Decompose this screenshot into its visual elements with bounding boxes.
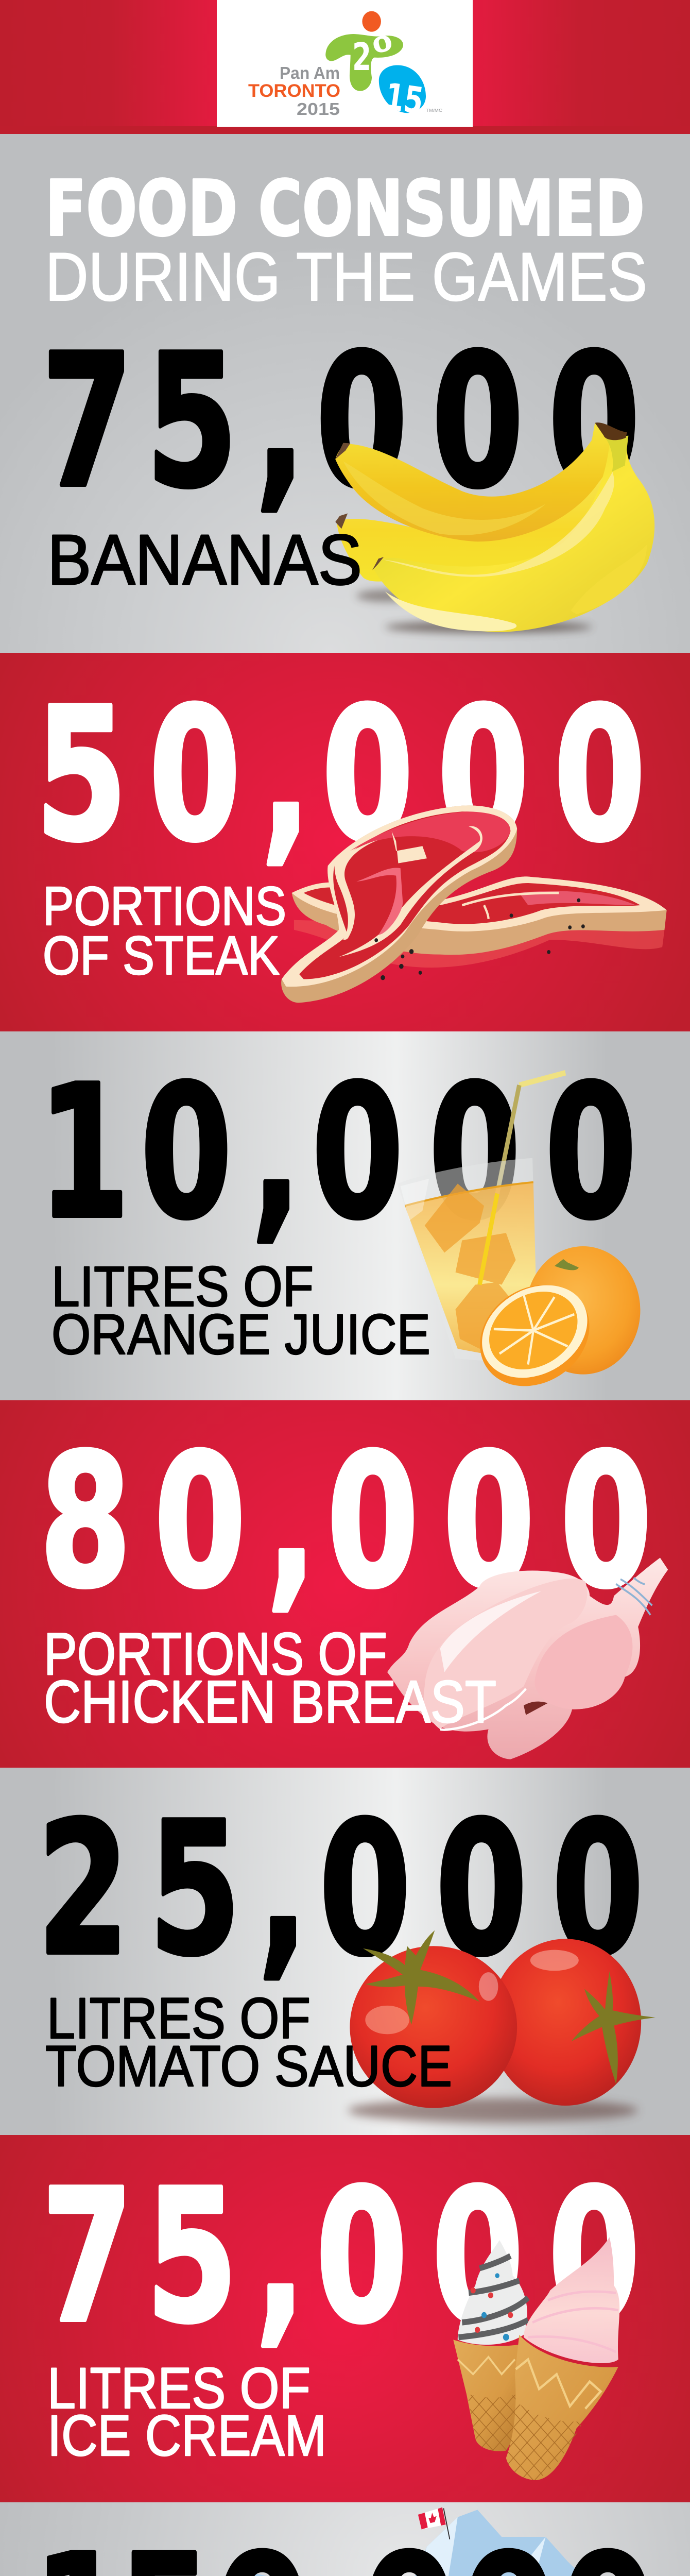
- label: litres of orange juice: LITRES OF: [51, 1255, 314, 1318]
- illustration: mountain with flag: [104, 2507, 647, 2576]
- number: 75,000: 75,000: [42, 315, 640, 528]
- label: litres of ice cream: ICE CREAM: [47, 2403, 326, 2468]
- title: [45, 164, 647, 315]
- label: litres of tomato sauce: TOMATO SAUCE: [45, 2034, 452, 2098]
- logo numerals: 0: [370, 30, 395, 59]
- logo: Pan Am Toronto 2015: [217, 0, 473, 127]
- logo figure body: [325, 34, 403, 91]
- panel: bananas: [0, 134, 690, 653]
- logo wordmark: 2015: [297, 99, 340, 118]
- number: 80,000: 80,000: [40, 1415, 652, 1628]
- header band: [0, 0, 690, 134]
- label: portions of chicken breast: PORTIONS OF: [44, 1620, 387, 1687]
- icon: chicken: [387, 1558, 668, 1759]
- label: litres of ice cream: LITRES OF: [47, 2356, 310, 2420]
- label: portions of steak: [43, 876, 286, 986]
- label: litres of tomato sauce: LITRES OF: [47, 1986, 310, 2050]
- logo wordmark: TM/MC: [426, 108, 442, 113]
- icon: juice glass and oranges: [398, 1073, 640, 1404]
- label: litres of ice cream: [47, 2356, 326, 2468]
- logo numerals: [352, 30, 426, 123]
- logo wordmark: TORONTO: [248, 81, 340, 101]
- label: litres of tomato sauce: [45, 1986, 452, 2098]
- number: 75,000: 75,000: [42, 2150, 640, 2363]
- icon: ice cream cones: [453, 2237, 619, 2480]
- panel: steak: [0, 653, 690, 1032]
- label: bananas: BANANAS: [47, 520, 362, 600]
- logo figure head: [362, 11, 381, 32]
- logo wordmark: Pan Am: [280, 63, 340, 82]
- logo numerals: 15: [383, 75, 426, 123]
- logo numerals: 2: [352, 35, 371, 79]
- number: 10,000: 10,000: [38, 1046, 636, 1259]
- panel: tomato sauce: [0, 1768, 690, 2136]
- label: portions of chicken breast: CHICKEN BREAST: [44, 1668, 496, 1735]
- panel: chicken: [0, 1400, 690, 1768]
- panel: orange juice: [0, 1031, 690, 1404]
- label: portions of steak: OF STEAK: [43, 925, 280, 986]
- label: litres of orange juice: ORANGE JUICE: [51, 1303, 430, 1366]
- label: portions of steak: PORTIONS: [43, 876, 286, 937]
- icon: steak: [281, 805, 667, 1003]
- logo wordmark: [248, 63, 442, 118]
- logo blue ball: [379, 65, 426, 113]
- label: portions of chicken breast: [44, 1620, 496, 1735]
- icon: bananas: [335, 422, 654, 633]
- label: litres of orange juice: [51, 1255, 430, 1366]
- icon: tomatoes: [348, 1930, 656, 2123]
- number: 25,000: 25,000: [38, 1783, 644, 1996]
- panel: eggs: [0, 2502, 690, 2576]
- panel: ice cream: [0, 2135, 690, 2503]
- number: 50,000: 50,000: [36, 669, 646, 882]
